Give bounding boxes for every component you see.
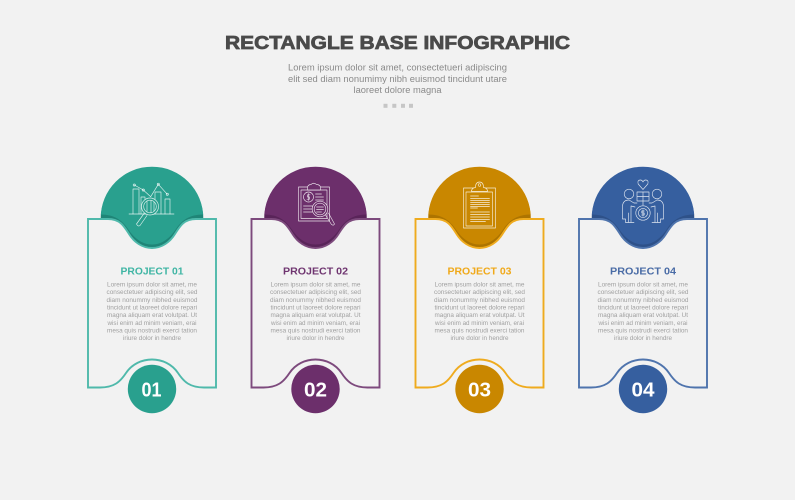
dome: project 04 [592, 167, 694, 250]
body text: project 04: diam nonummy nibhed euismod [598, 297, 689, 304]
body text: project 04: Lorem ipsum dolor sit amet, me [598, 282, 688, 289]
dots divider [384, 104, 413, 108]
panel: project 03 [416, 167, 544, 413]
body text: project 03: consectetuer adipiscing elit, sed [434, 289, 525, 296]
subtitle text [288, 62, 507, 96]
number badge: 03: 03 [468, 378, 491, 402]
number badge: 02: 02 [304, 378, 327, 402]
icon: clipboard document [464, 182, 496, 228]
heading: project 01: PROJECT 01 [120, 266, 184, 278]
subtitle text: Lorem ipsum dolor sit amet, consectetueri adipiscing [288, 62, 507, 73]
icon: chart with magnifier [129, 183, 174, 226]
number badge: 04: 04 [632, 378, 655, 402]
body text: project 04: consectetuer adipiscing elit, sed [598, 289, 689, 296]
subtitle text: laoreet dolore magna [354, 85, 442, 96]
icon: clipboard with magnifier [298, 183, 334, 225]
body text: project 02: consectetuer adipiscing elit, sed [270, 289, 361, 296]
title: RECTANGLE BASE INFOGRAPHIC [225, 32, 570, 53]
body text: project 03: diam nonummy nibhed euismod [434, 297, 525, 304]
body text: project 02: tincidunt ut laoreet dolore repari [270, 304, 361, 312]
body text: project 04: wisi enim ad minim veniam, erai [598, 320, 688, 327]
number badge: 03 [455, 365, 504, 413]
body text: project 01: mesa quis nostrudi exerci tation [107, 327, 197, 334]
body text: project 02: Lorem ipsum dolor sit amet, me [270, 282, 361, 289]
heading: project 03: PROJECT 03 [448, 266, 512, 278]
panel: project 01 [88, 167, 216, 413]
body text: project 04 [598, 282, 689, 342]
panel: project 04 [579, 167, 707, 413]
panel: project 02 [252, 167, 380, 413]
heading: project 02: PROJECT 02 [283, 266, 348, 278]
body text: project 03: wisi enim ad minim veniam, erai [434, 320, 524, 327]
body text: project 01: diam nonummy nibhed euismod [106, 297, 198, 304]
body text: project 02: mesa quis nostrudi exerci tation [270, 327, 361, 334]
card outline: project 01 [88, 219, 216, 388]
body text: project 01: wisi enim ad minim veniam, erai [107, 320, 197, 327]
body text: project 01 [106, 282, 198, 342]
heading: project 04: PROJECT 04 [610, 266, 676, 278]
number badge: 04 [619, 365, 667, 413]
body text: project 03 [434, 282, 525, 342]
body text: project 03: Lorem ipsum dolor sit amet, me [434, 282, 525, 289]
number badge: 01: 01 [142, 378, 162, 402]
body text: project 04: iriure dolor in hendre [614, 335, 672, 342]
body text: project 02: wisi enim ad minim veniam, erai [270, 320, 360, 327]
card outline: project 02 [252, 219, 380, 388]
body text: project 01: tincidunt ut laoreet dolore repari [107, 304, 197, 312]
body text: project 04: magna aliquam erat volutpat. Ut [598, 312, 688, 319]
dome: project 02 [264, 167, 367, 250]
body text: project 02: magna aliquam erat volutpat. Ut [270, 312, 361, 319]
body text: project 04: tincidunt ut laoreet dolore repari [598, 304, 688, 312]
body text: project 02: iriure dolor in hendre [286, 335, 345, 342]
body text: project 01: consectetuer adipiscing elit, sed [106, 289, 198, 296]
body text: project 03: magna aliquam erat volutpat. Ut [434, 312, 525, 319]
dome: project 03 [428, 167, 531, 250]
body text: project 04: mesa quis nostrudi exerci tation [598, 327, 688, 334]
subtitle text: elit sed diam nonumimy nibh euismod tincidunt utare [288, 74, 507, 85]
body text: project 01: magna aliquam erat volutpat. Ut [107, 312, 197, 319]
number badge: 01 [128, 365, 176, 413]
card outline: project 03 [416, 219, 544, 388]
body text: project 01: Lorem ipsum dolor sit amet, me [107, 282, 197, 289]
dome: project 01 [101, 167, 203, 250]
card outline: project 04 [579, 219, 707, 388]
body text: project 03: iriure dolor in hendre [450, 335, 509, 342]
body text: project 01: iriure dolor in hendre [123, 335, 181, 342]
number badge: 02 [291, 365, 340, 413]
body text: project 03: tincidunt ut laoreet dolore repari [434, 304, 525, 312]
icon: two people with heart and coin [622, 180, 664, 222]
body text: project 03: mesa quis nostrudi exerci tation [434, 327, 525, 334]
body text: project 02: diam nonummy nibhed euismod [270, 297, 361, 304]
body text: project 02 [270, 282, 361, 342]
